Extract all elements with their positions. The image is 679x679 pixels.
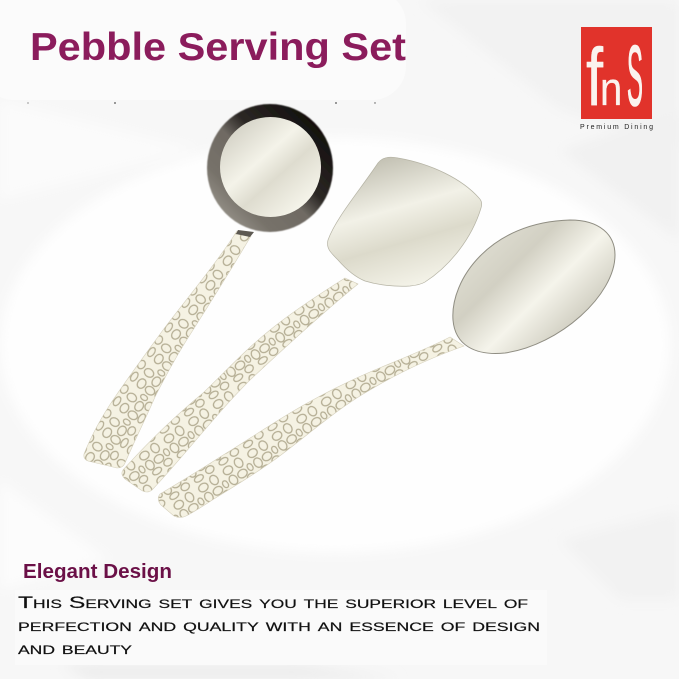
specks under title [27, 102, 376, 104]
spatula handle [122, 278, 358, 492]
serving spoon [158, 220, 615, 518]
logo letters [586, 30, 643, 124]
spoon handle [158, 337, 464, 518]
body text: This Serving set gives you the superior level of [18, 593, 528, 612]
logo letters: S [627, 30, 643, 124]
logo letters: n [600, 64, 622, 116]
ladle handle [84, 231, 251, 468]
body text [18, 593, 540, 658]
title panel [0, 0, 406, 100]
ladle [84, 104, 333, 468]
body text: and beauty [18, 639, 132, 658]
body text: perfection and quality with an essence of design [18, 616, 540, 635]
spoon head [453, 220, 615, 353]
text panel: Elegant Design [15, 561, 547, 665]
logo: FnS Premium Dining [580, 27, 653, 131]
heading: Elegant Design [23, 561, 172, 583]
logo letters: f [586, 31, 604, 123]
spatula [122, 157, 482, 492]
ladle neck [236, 230, 254, 237]
title: Pebble Serving Set [30, 26, 406, 69]
spatula head [327, 157, 482, 286]
logo tagline: Premium Dining [580, 124, 653, 131]
ladle bowl [207, 104, 333, 232]
